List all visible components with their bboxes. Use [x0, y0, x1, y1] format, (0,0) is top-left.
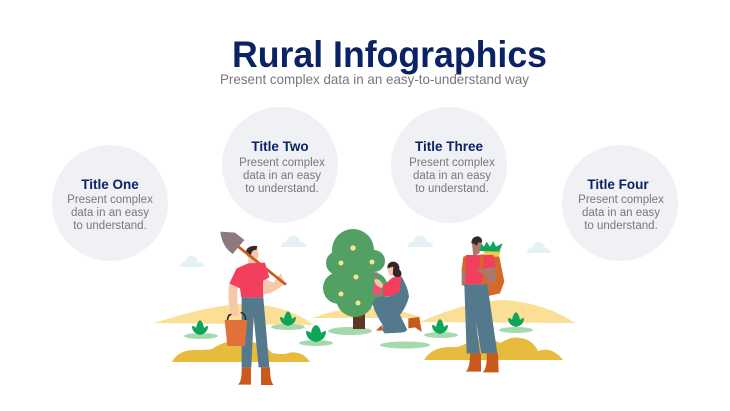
panel: title three: Present complex: [409, 157, 495, 169]
panel: title one: Title One: [81, 177, 139, 192]
panel: title two: Title Two: [251, 139, 309, 154]
pale hills: [154, 300, 575, 325]
panel: title one: data in an easy: [71, 207, 149, 219]
panel: title one: [52, 145, 168, 261]
subtitle: Present complex data in an easy-to-understand way: [220, 71, 529, 87]
panel: title three: data in an easy: [413, 170, 491, 182]
figure: woman tending tree: [373, 262, 422, 333]
panel: title two: to understand.: [245, 183, 319, 195]
clouds: [180, 236, 551, 267]
panel: title four: [562, 145, 678, 261]
panel: title one: to understand.: [73, 220, 147, 232]
plants: [192, 311, 524, 342]
panel: title three: to understand.: [415, 183, 489, 195]
panel: title four: to understand.: [584, 220, 658, 232]
panel: title four: Title Four: [587, 177, 649, 192]
panel: title two: [222, 107, 338, 223]
gold mounds: [172, 338, 563, 362]
panel: title four: data in an easy: [582, 207, 660, 219]
title: Rural Infographics: [232, 34, 547, 75]
panel: title one: Present complex: [67, 194, 153, 206]
panel: title two: data in an easy: [243, 170, 321, 182]
tree: [323, 229, 388, 329]
panel: title three: [391, 107, 507, 223]
panel: title two: Present complex: [239, 157, 325, 169]
figure: man with shovel and bucket: [220, 232, 286, 385]
panel: title four: Present complex: [578, 194, 664, 206]
figure: farmer with backpack: [462, 236, 504, 372]
panel: title three: Title Three: [415, 139, 483, 154]
grass patches: [184, 324, 533, 348]
